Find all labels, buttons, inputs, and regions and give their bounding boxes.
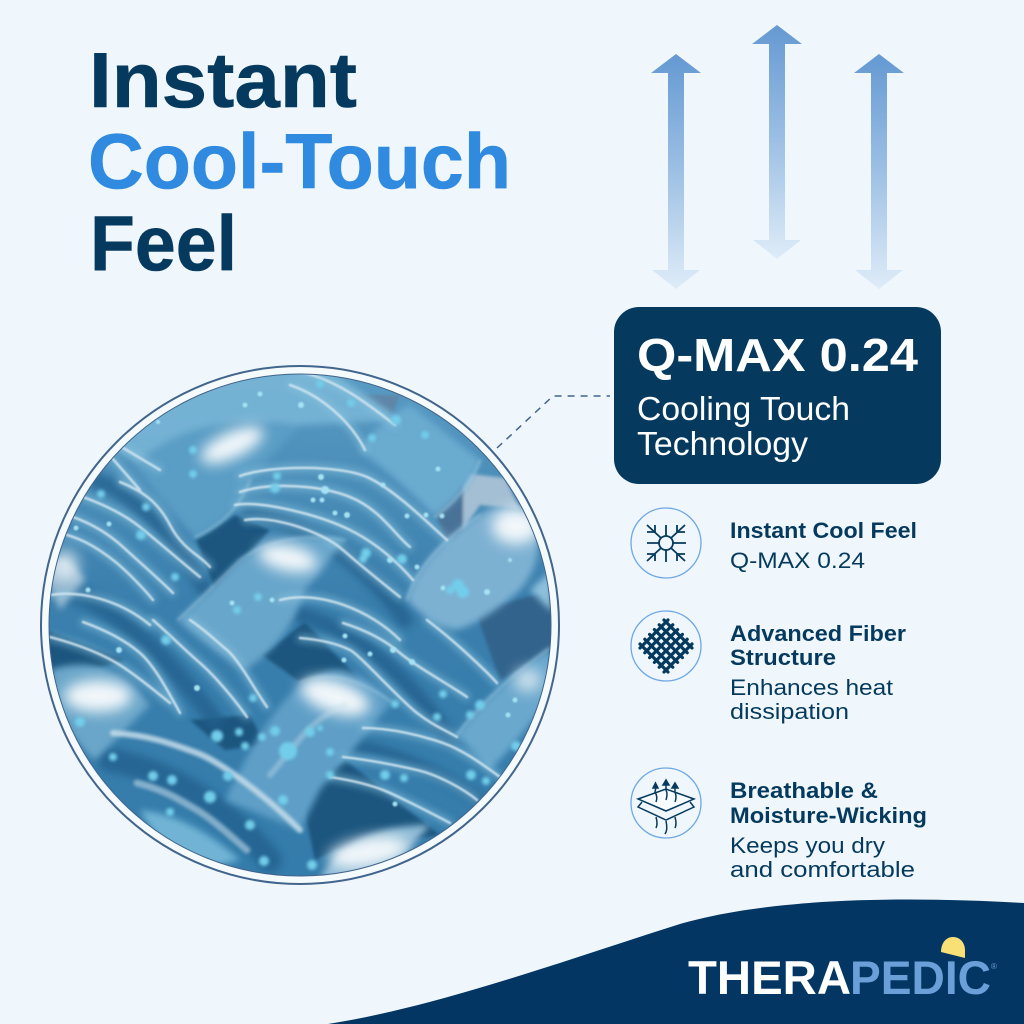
callout description: Technology bbox=[637, 425, 809, 462]
title: Feel bbox=[90, 199, 237, 287]
feature: advanced fiber structure bbox=[631, 611, 906, 724]
text: breathable and moisture-wicking: Keeps you dry bbox=[730, 833, 886, 858]
icon: fiber mesh bbox=[631, 611, 701, 681]
small bubbles bbox=[74, 390, 518, 806]
feature: breathable and moisture-wicking bbox=[631, 768, 927, 882]
text: breathable and moisture-wicking: Breathable & bbox=[730, 778, 878, 803]
text: advanced fiber structure: dissipation bbox=[730, 699, 849, 724]
callout description: Cooling Touch bbox=[637, 390, 850, 427]
logo: Therapedic: PEDIC bbox=[850, 951, 991, 1004]
logo sun bbox=[941, 937, 965, 958]
text: breathable and moisture-wicking: and comfortable bbox=[730, 857, 915, 882]
text: advanced fiber structure: Enhances heat bbox=[730, 675, 894, 700]
icon: breathable layers bbox=[631, 768, 701, 838]
text: advanced fiber structure: Structure bbox=[730, 645, 836, 670]
arrow right bbox=[854, 54, 904, 289]
feature: instant cool feel bbox=[631, 508, 917, 578]
Q-MAX heading: Q-MAX 0.24 bbox=[637, 329, 918, 381]
panel: Q-MAX callout bbox=[614, 307, 941, 484]
fiber streaks bbox=[50, 372, 500, 823]
arrows: heat transfer bbox=[651, 25, 904, 289]
text: breathable and moisture-wicking: Moisture-Wicking bbox=[730, 803, 927, 828]
soft lower fiber streaks bbox=[113, 705, 345, 850]
text: instant cool feel: Q-MAX 0.24 bbox=[730, 548, 865, 573]
title bbox=[88, 36, 511, 287]
text: breathable and moisture-wicking bbox=[730, 778, 927, 882]
text: advanced fiber structure bbox=[730, 621, 906, 724]
logo: Therapedic: THERA bbox=[688, 951, 851, 1004]
text: instant cool feel: Instant Cool Feel bbox=[730, 518, 917, 543]
footer wave bbox=[328, 900, 1024, 1024]
text: instant cool feel bbox=[730, 518, 917, 573]
large soft bubbles bbox=[75, 380, 521, 870]
arrow left bbox=[651, 54, 701, 289]
fiber streak glow bbox=[50, 372, 500, 823]
logo: Therapedic: ® bbox=[991, 962, 997, 971]
arrow middle bbox=[752, 25, 802, 259]
glassy strand blobs bbox=[45, 368, 555, 880]
callout description bbox=[637, 390, 850, 462]
white highlights bbox=[51, 419, 542, 873]
dark gaps bbox=[45, 395, 555, 860]
dark fiber shadows bbox=[60, 480, 480, 860]
glass edge highlights bbox=[178, 460, 550, 735]
icon: snowflake bbox=[631, 508, 701, 578]
magnified fiber photo circle bbox=[40, 366, 560, 886]
title: Instant bbox=[89, 36, 357, 124]
callout connector line bbox=[497, 396, 610, 448]
title: Cool-Touch bbox=[88, 117, 511, 205]
logo: Therapedic bbox=[688, 937, 997, 1004]
text: advanced fiber structure: Advanced Fiber bbox=[730, 621, 906, 646]
